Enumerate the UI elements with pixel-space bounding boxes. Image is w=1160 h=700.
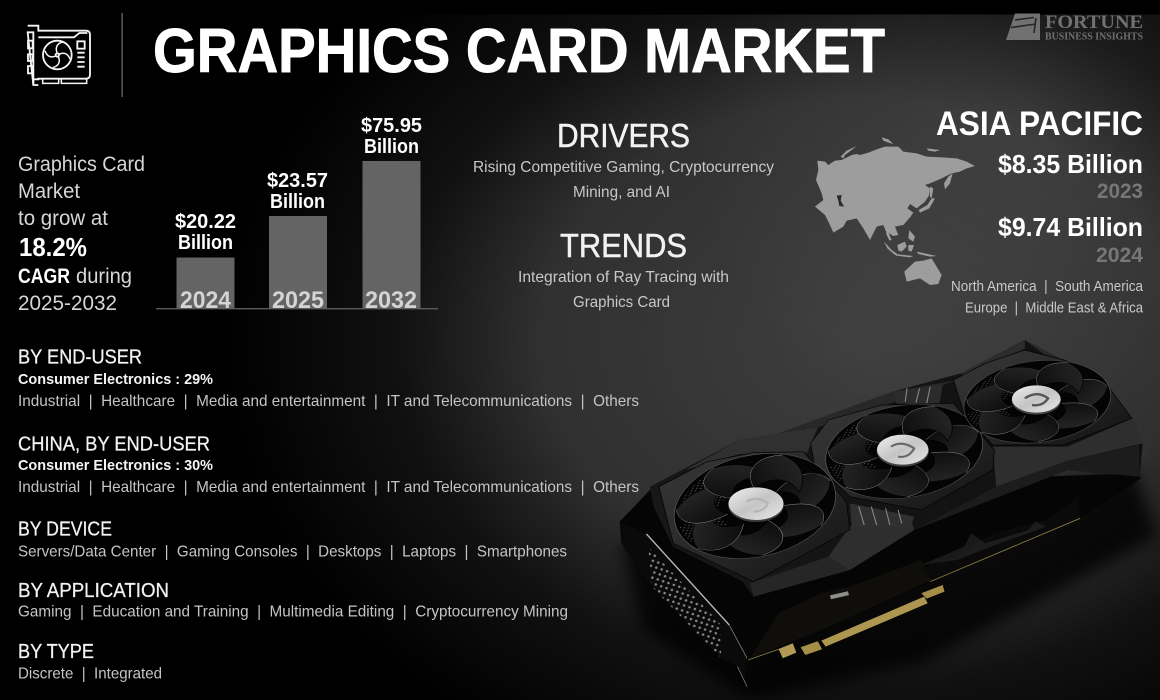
bar chart: market size: 2024 (180, 287, 232, 314)
panel: Asia Pacific stats: ASIA PACIFIC (936, 105, 1143, 143)
map: Asia Pacific (815, 137, 975, 285)
panel: CAGR text: during (76, 264, 132, 288)
segment: by end-user (18, 346, 639, 410)
segment: by type: Discrete | Integrated (18, 666, 162, 682)
segment: by type (18, 641, 162, 682)
panel: drivers: Rising Competitive Gaming, Cryptocurrency (473, 159, 774, 176)
segment: by end-user: BY END-USER (18, 346, 142, 368)
segment: by end-user: Consumer Electronics : 29% (18, 371, 213, 388)
panel: CAGR text: 2025-2032 (18, 291, 117, 315)
bar chart: market size: 2032 (365, 287, 417, 314)
panel: trends (518, 227, 729, 311)
segment: by device: BY DEVICE (18, 518, 112, 540)
panel: Asia Pacific stats: 2024 (1096, 244, 1143, 267)
segment: China by end-user: CHINA, BY END-USER (18, 434, 210, 456)
panel: CAGR text (18, 152, 145, 315)
panel: Asia Pacific stats: $8.35 Billion (998, 149, 1143, 179)
bar chart: market size: 2025 (272, 287, 324, 314)
segment: by type: BY TYPE (18, 641, 94, 663)
panel: drivers: Mining, and AI (573, 184, 670, 201)
panel: CAGR text: 18.2% (19, 232, 87, 262)
segment: China by end-user: Consumer Electronics : 30% (18, 457, 213, 474)
panel: drivers (473, 117, 774, 201)
segment: by device: Servers/Data Center | Gaming Consoles | Desktops | Laptops | Smartphones (18, 544, 567, 560)
segment: China by end-user: Industrial | Healthcare | Media and entertainment | IT and Telecommunications | Others (18, 479, 639, 496)
bar chart: market size: $75.95 (361, 114, 422, 137)
segment: by application: Gaming | Education and Training | Multimedia Editing | Cryptocurrency Mining (18, 604, 568, 620)
panel: trends: Integration of Ray Tracing with (518, 269, 729, 286)
panel: Asia Pacific stats (936, 105, 1144, 316)
bar chart: market size: Billion (270, 190, 325, 213)
segment: by application: BY APPLICATION (18, 580, 169, 602)
image: graphics card product (620, 340, 1157, 700)
title: GRAPHICS CARD MARKET (153, 17, 885, 86)
bar chart: market size: Billion (364, 135, 419, 158)
panel: CAGR text: to grow at (18, 206, 108, 230)
panel: CAGR text: CAGR (18, 265, 70, 288)
logo: Fortune Business Insights: BUSINESS INSIGHTS (1045, 32, 1143, 42)
panel: drivers: DRIVERS (557, 117, 690, 154)
panel: Asia Pacific stats: Europe | Middle East & Africa (965, 300, 1144, 316)
divider (122, 13, 123, 97)
bar chart: market size: $20.22 (175, 210, 236, 233)
panel: CAGR text: Market (18, 179, 80, 203)
bar chart: market size: Billion (178, 231, 233, 254)
segment: China by end-user (18, 434, 639, 496)
fan right (954, 350, 1117, 453)
panel: trends: TRENDS (560, 227, 687, 264)
cooler shroud (650, 340, 1143, 597)
segment: by application (18, 580, 568, 620)
panel: Asia Pacific stats: $9.74 Billion (998, 212, 1143, 242)
fan middle (814, 392, 991, 512)
fan left (658, 437, 848, 576)
gold edge connector (748, 518, 1080, 660)
bar chart: market size: $23.57 (267, 169, 328, 192)
top black band (0, 0, 1160, 14)
segment: by device (18, 518, 567, 560)
bar chart: market size (156, 114, 438, 314)
panel: trends: Graphics Card (573, 294, 670, 311)
panel: Asia Pacific stats: 2023 (1097, 180, 1143, 203)
segment: by end-user: Industrial | Healthcare | Media and entertainment | IT and Telecommunications | Others (18, 393, 639, 410)
panel: Asia Pacific stats: North America | South America (951, 279, 1144, 295)
icon: graphics card (28, 26, 90, 85)
logo: Fortune Business Insights (1006, 12, 1143, 42)
logo: Fortune Business Insights: FORTUNE (1045, 12, 1143, 33)
panel: CAGR text: Graphics Card (18, 152, 145, 176)
